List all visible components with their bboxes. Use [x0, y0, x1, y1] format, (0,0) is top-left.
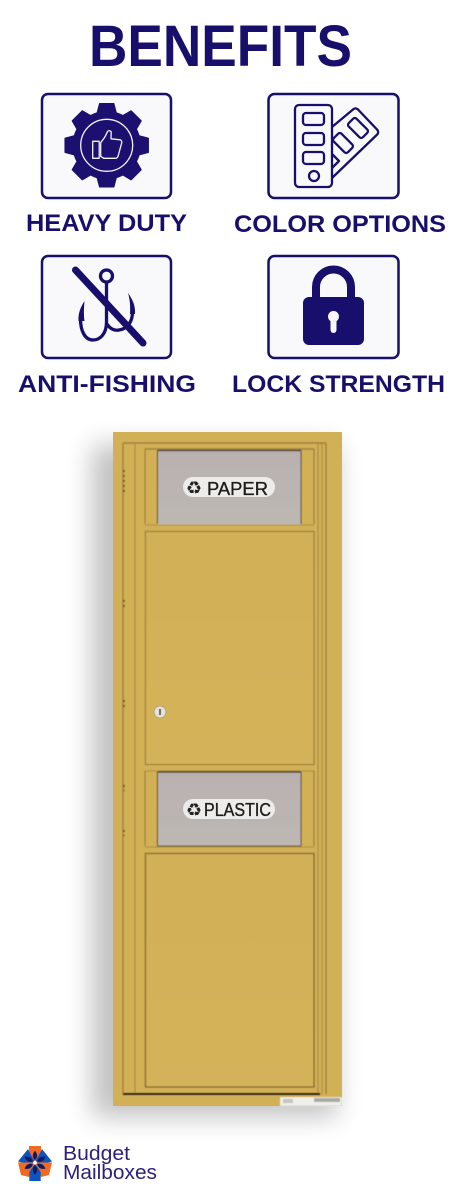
- logo text: Budget: [63, 1143, 130, 1165]
- label: LOCK STRENGTH: [232, 371, 445, 398]
- label: ANTI-FISHING: [18, 371, 196, 398]
- icon box: [268, 94, 398, 198]
- panel: heavy duty: [26, 94, 187, 237]
- panel: lock strength: [232, 256, 445, 398]
- mailbox cabinet: [113, 432, 342, 1106]
- icon: padlock: [303, 270, 364, 345]
- icon box: [42, 256, 171, 358]
- logo: [18, 1143, 157, 1184]
- panel: color options: [234, 94, 446, 238]
- chute: plastic: [158, 772, 301, 846]
- sign: paper: PAPER: [207, 478, 268, 499]
- cabinet shadow: [92, 445, 337, 1117]
- icon: color swatches: [295, 105, 378, 187]
- door: lower: [146, 854, 314, 1087]
- icon: crossed-out hook: [76, 270, 143, 343]
- sign: paper: ♻: [186, 478, 202, 499]
- icon: gear with thumbs up: [65, 104, 148, 187]
- logo text: [63, 1143, 157, 1184]
- sign: plastic: ♻: [186, 800, 202, 821]
- door: upper: [146, 532, 314, 764]
- sign: paper: [183, 477, 275, 499]
- frame lines: [123, 443, 326, 1094]
- key lock: [154, 706, 166, 718]
- icon box: [268, 256, 398, 358]
- chute: paper: [158, 450, 301, 524]
- logo text: Mailboxes: [63, 1162, 157, 1184]
- icon box: [42, 94, 171, 198]
- window: [158, 772, 301, 846]
- label: HEAVY DUTY: [26, 210, 187, 237]
- cabinet body: [113, 432, 342, 1106]
- panel: anti-fishing: [18, 256, 196, 398]
- title: BENEFITS: [89, 14, 352, 79]
- window: [158, 450, 301, 524]
- sign: plastic: [183, 799, 275, 821]
- label: COLOR OPTIONS: [234, 211, 446, 238]
- sticker: [280, 1097, 342, 1106]
- sign: plastic: PLASTIC: [204, 799, 271, 820]
- logo mark: [18, 1146, 52, 1181]
